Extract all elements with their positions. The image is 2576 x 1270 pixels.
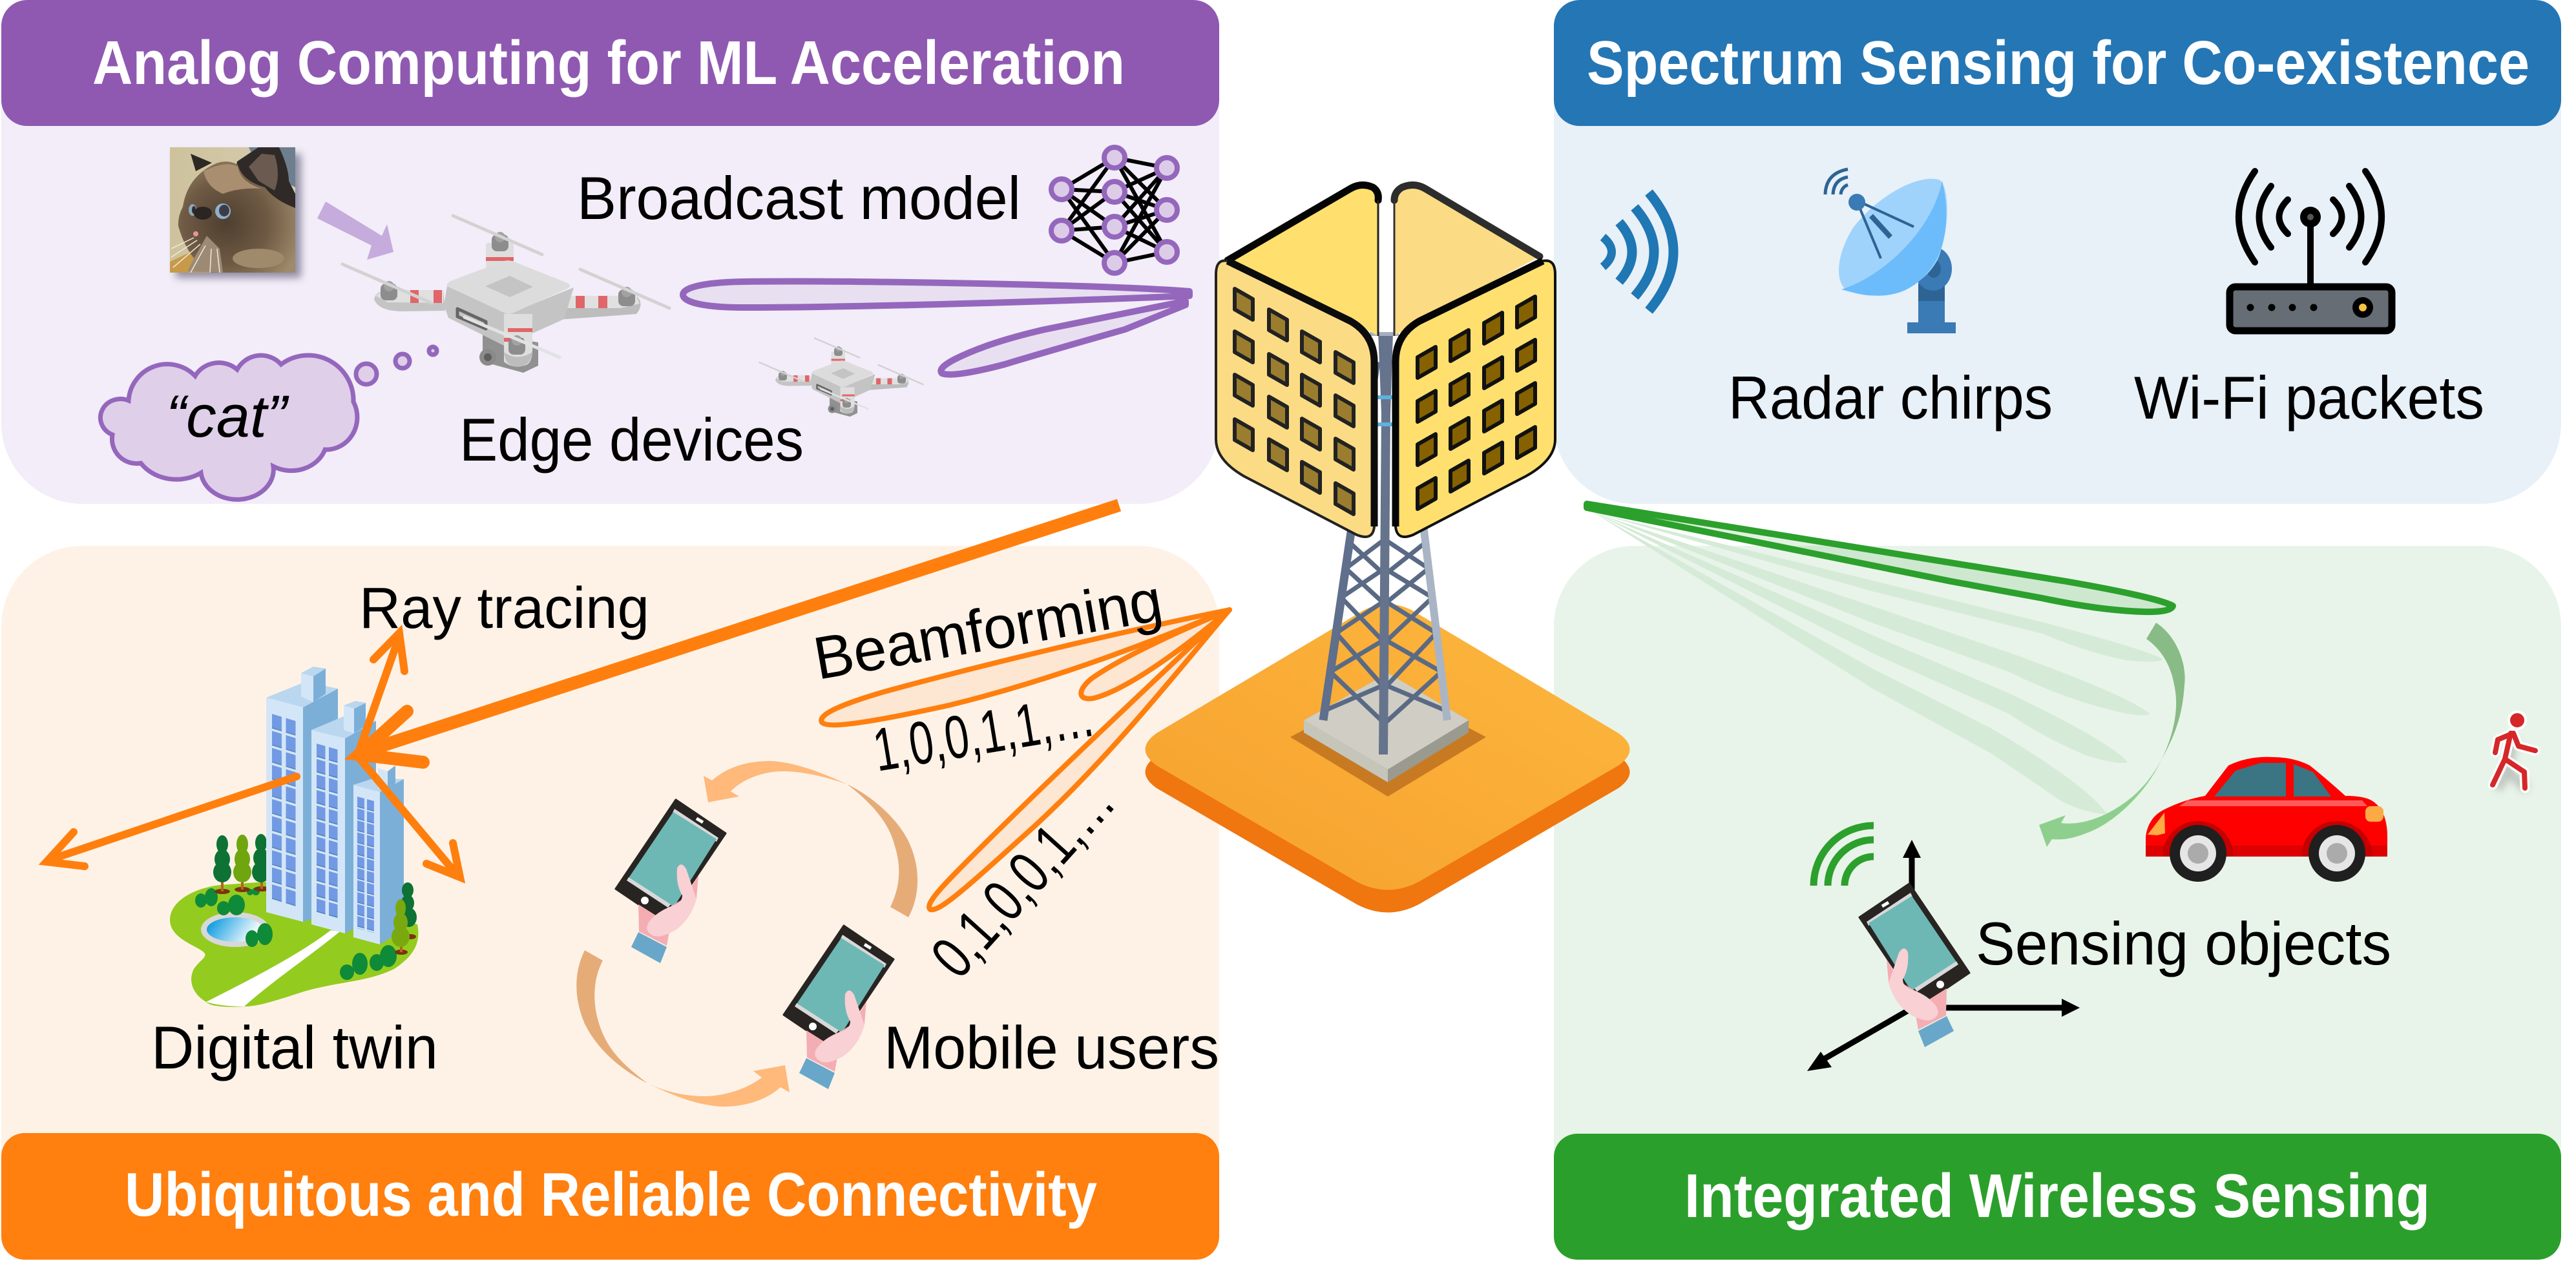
- label: edge devices: Edge devices: [459, 406, 804, 474]
- antenna panel back left: [1228, 185, 1378, 336]
- arrow: reflected ray up: [357, 633, 404, 756]
- arrow: green curved reflection: [2039, 623, 2185, 847]
- label: radar chirps: Radar chirps: [1728, 364, 2053, 432]
- icon: phone and hand sensing: [1859, 884, 1969, 1047]
- antenna panel front left: [1216, 260, 1374, 537]
- icon: green wifi arcs: [1814, 826, 1874, 886]
- arrow: reflected ray down: [357, 756, 460, 877]
- platform: [1145, 604, 1629, 912]
- digital twin city block: [170, 667, 419, 1007]
- header: wireless sensing: Integrated Wireless Sensing: [1684, 1161, 2430, 1231]
- thought cloud: cat: [100, 347, 437, 499]
- arrow: reflected ray left: [47, 776, 297, 866]
- beam: upper purple lobe: [683, 282, 1189, 307]
- label: broadcast model: Broadcast model: [577, 164, 1021, 232]
- label: beamforming: Beamforming: [809, 566, 1167, 692]
- panel: connectivity background: [1, 546, 1219, 1260]
- beam: green main lobe: [1587, 504, 2173, 612]
- cat photo: [170, 147, 301, 278]
- label: sensing objects: Sensing objects: [1976, 910, 2391, 977]
- lattice mast: [1323, 332, 1447, 755]
- icon: wi-fi router: [2230, 171, 2392, 331]
- drone: small edge device: [760, 338, 923, 417]
- arrow: upper curved exchange: [704, 761, 917, 917]
- icon: blue signal waves: [1603, 193, 1673, 311]
- icon: red car: [2146, 757, 2387, 882]
- header: connectivity: Ubiquitous and Reliable Connectivity: [125, 1160, 1097, 1229]
- icon: pedestrian: [2493, 712, 2535, 789]
- antenna panel front right: [1396, 260, 1555, 537]
- axes: phone orientation: [1807, 840, 2080, 1071]
- beam: lower purple lobe: [941, 301, 1186, 375]
- header: connectivity: [1, 1133, 1219, 1260]
- icon: phone and hand bottom: [784, 926, 894, 1089]
- header: spectrum sensing: [1554, 0, 2561, 126]
- beams: orange lobes: [821, 610, 1230, 910]
- arrow: long incoming ray: [359, 505, 1119, 762]
- beams: faded green lobes: [1593, 512, 2162, 814]
- arrow: lower curved exchange: [576, 950, 790, 1107]
- thought cloud: cat: “cat”: [166, 384, 289, 450]
- panel: analog computing background: [1, 0, 1219, 504]
- label: digital twin: Digital twin: [151, 1014, 438, 1081]
- icon: radar dish: [1825, 169, 1956, 333]
- label: bitstream two: 0,1,0,0,1,…: [918, 768, 1127, 990]
- base station tower: [1145, 185, 1629, 912]
- panel: wireless sensing background: [1554, 546, 2561, 1260]
- panel: spectrum sensing background: [1554, 0, 2561, 504]
- header: wireless sensing: [1554, 1134, 2561, 1260]
- label: bitstream one: 1,0,0,1,1,…: [868, 681, 1100, 784]
- header: analog computing: Analog Computing for ML Acceleration: [92, 28, 1125, 98]
- antenna panel back right: [1394, 185, 1540, 336]
- label: ray tracing: Ray tracing: [359, 576, 649, 641]
- arrow: input to drone: [317, 202, 393, 260]
- label: mobile users: Mobile users: [884, 1014, 1219, 1081]
- label: wi-fi packets: Wi-Fi packets: [2134, 364, 2484, 432]
- drone: large edge device: [342, 216, 669, 373]
- icon: neural network: [1051, 147, 1177, 273]
- header: analog computing: [1, 0, 1219, 126]
- icon: phone and hand top: [616, 800, 726, 963]
